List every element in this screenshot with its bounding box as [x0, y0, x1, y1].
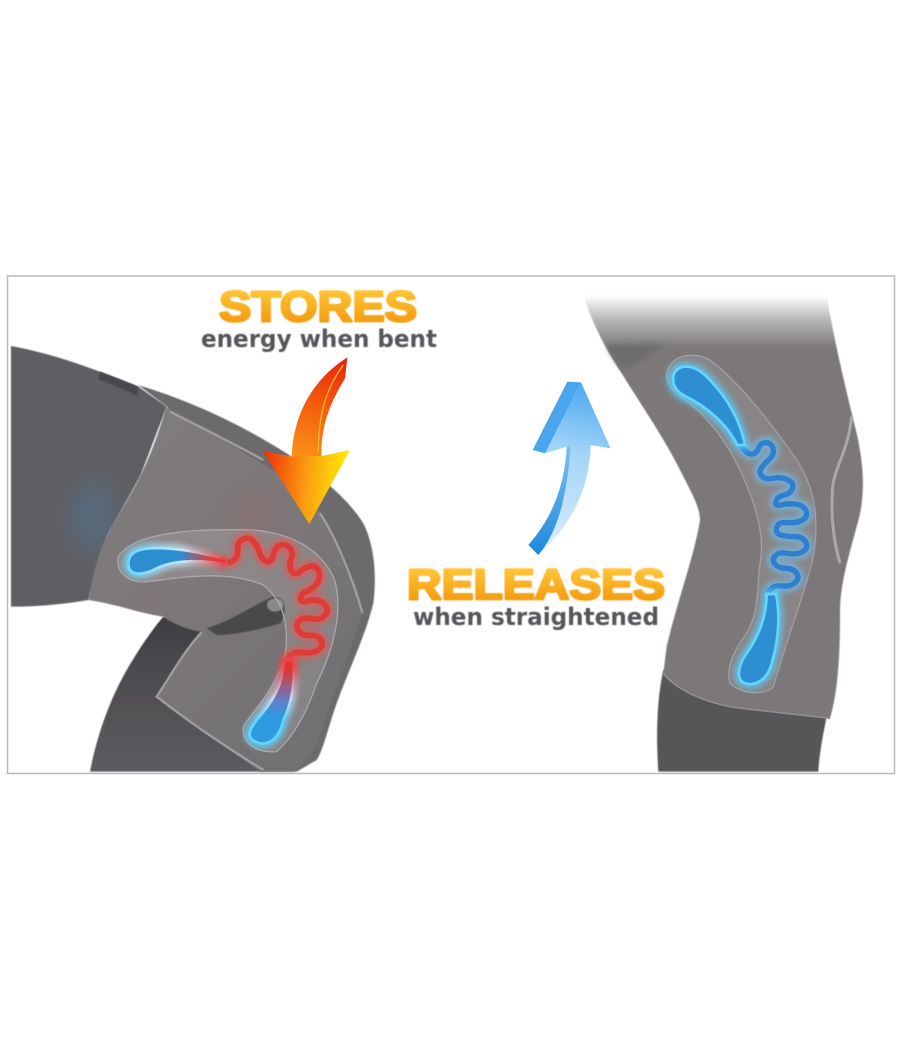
blue spring glow — [742, 443, 807, 592]
heading: STORES: STORES — [219, 283, 417, 331]
pad halo — [118, 530, 338, 752]
subheading: energy when bent: energy when bent — [201, 325, 437, 353]
crease highlight — [267, 598, 283, 612]
heading: RELEASES: RELEASES — [407, 561, 665, 609]
shaft highlight — [318, 365, 343, 452]
blue spring — [742, 443, 807, 592]
figure: bent knee in sleeve — [11, 346, 375, 772]
hem — [663, 673, 830, 718]
thigh — [11, 346, 167, 607]
arrow shaft dark band — [528, 447, 571, 555]
upper pad glow — [128, 548, 220, 574]
arrow head left facet — [533, 382, 581, 453]
upper pad — [128, 548, 227, 574]
sleeve back band — [138, 385, 375, 772]
thigh shadow — [607, 344, 667, 369]
arrow shaft light face — [528, 445, 591, 555]
arrow shaft — [292, 357, 347, 460]
arrow: blue upward — [528, 382, 611, 555]
lower pad — [739, 594, 778, 684]
lower pad glow — [250, 660, 294, 744]
thigh blue glow — [70, 480, 117, 553]
seam — [832, 417, 852, 563]
lower pad — [250, 660, 294, 744]
seam lines — [157, 412, 363, 770]
arrow head — [263, 450, 350, 524]
thigh top strip — [98, 372, 138, 396]
red spring — [223, 538, 327, 667]
sleeve main panel — [88, 407, 362, 772]
heat glow — [237, 497, 270, 530]
calf — [90, 617, 263, 772]
red glow — [227, 538, 327, 667]
calf — [657, 670, 827, 772]
pad halo — [667, 355, 816, 693]
sleeve — [583, 295, 863, 718]
figure: straight knee in sleeve — [583, 295, 863, 772]
subheading: when straightened: when straightened — [413, 603, 659, 631]
lower pad glow — [739, 594, 778, 684]
arrow: orange downward — [263, 357, 350, 524]
arrow head face — [545, 382, 611, 453]
panel frame — [8, 276, 894, 774]
upper pad — [673, 367, 745, 445]
upper pad glow — [672, 367, 745, 445]
knee crease — [207, 597, 285, 635]
